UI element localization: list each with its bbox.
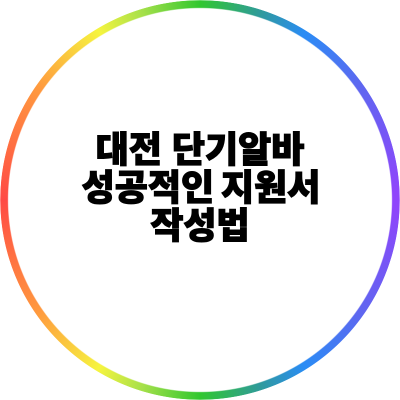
title: 대전 단기알바 [96,129,304,170]
title [82,129,320,246]
title: 작성법 [150,205,250,246]
title: 성공적인 지원서 [82,167,320,208]
